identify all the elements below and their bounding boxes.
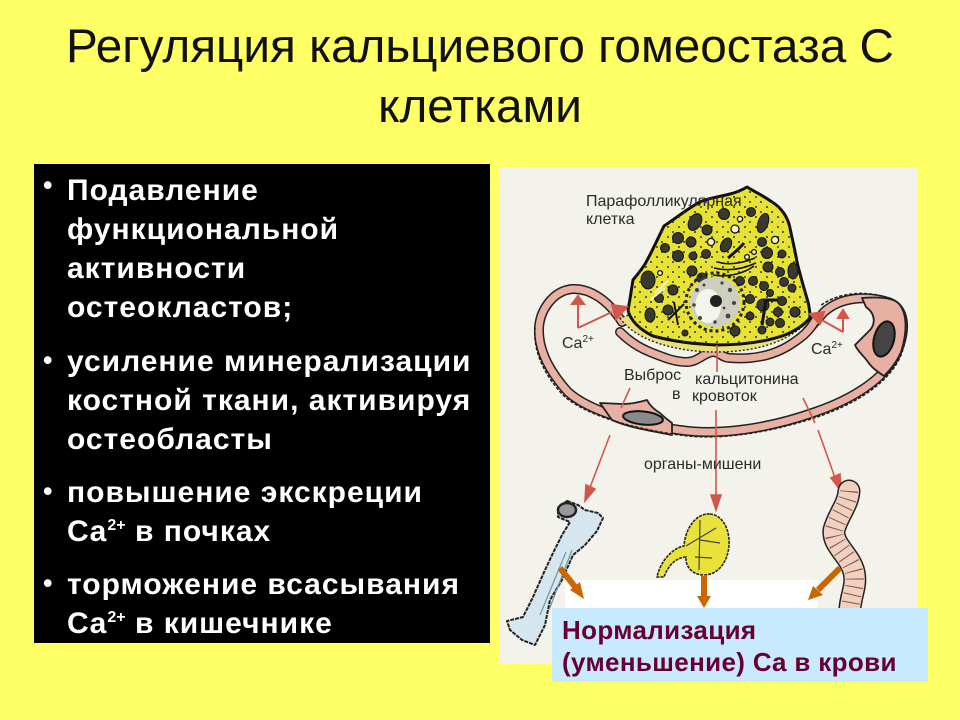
kidney with ureter	[657, 514, 729, 577]
panel: calcitonin effects list: •	[43, 568, 52, 598]
diagram labels: органы-мишени	[644, 456, 761, 473]
white strip behind arrows	[565, 580, 818, 610]
golgi apparatus	[650, 243, 756, 300]
title	[66, 20, 894, 133]
bullet: osteoclast suppression: остеокластов;	[67, 291, 293, 324]
diagram labels: кровоток	[692, 388, 758, 405]
panel: calcitonin effects list: •	[43, 170, 52, 200]
lower left endothelial cell	[600, 400, 672, 435]
bullet: osteoclast suppression: функциональной	[67, 213, 339, 246]
left calcium arrow	[578, 300, 612, 328]
diagram labels: 2+	[582, 334, 594, 345]
bullet: mineralization: остеобласты	[67, 423, 273, 456]
bullet: mineralization: усиление минерализации	[67, 345, 471, 378]
diagram labels: клетка	[586, 211, 635, 228]
diagram labels: 2+	[831, 340, 843, 351]
stipple granules	[628, 187, 810, 345]
capillary vessel	[535, 289, 907, 437]
bullet: osteoclast suppression	[43, 170, 339, 324]
diagram labels: Ca	[562, 335, 582, 352]
diagram labels: в	[672, 386, 680, 403]
vessel segment under the cell	[620, 318, 817, 362]
bullet: calcium absorption: Ca2+ в кишечнике	[67, 607, 333, 640]
bullet: calcium excretion: повышение экскреции	[67, 476, 423, 509]
diagram background	[500, 168, 917, 664]
panel: calcitonin effects list: •	[43, 476, 52, 506]
nucleus	[686, 273, 744, 331]
panel: calcitonin effects list: •	[43, 345, 52, 375]
callout: normalization of blood calcium: (уменьшение) Ca в крови	[562, 647, 897, 677]
callout: normalization of blood calcium	[552, 608, 928, 682]
bullet: calcium absorption	[43, 568, 460, 640]
bone	[507, 501, 603, 645]
bullet: calcium excretion: Ca2+ в почках	[67, 515, 271, 548]
bullet: calcium absorption: торможение всасывания	[67, 568, 460, 601]
vesicles	[658, 216, 779, 275]
bullet: osteoclast suppression: Подавление	[67, 174, 259, 207]
calcium arrows	[572, 296, 848, 332]
title: клетками	[378, 80, 582, 133]
pericapillary dotted line	[535, 293, 907, 437]
intestine	[834, 491, 855, 608]
diagram labels: Ca	[811, 341, 831, 358]
callout: normalization of blood calcium: Нормализация	[562, 615, 756, 645]
orange arrows to result	[560, 568, 840, 608]
right calcium arrow	[820, 314, 843, 332]
bullet: mineralization: костной ткани, активируя	[67, 384, 471, 417]
bullet: calcium excretion	[43, 476, 423, 548]
bullet: osteoclast suppression: активности	[67, 252, 246, 285]
diagram labels: Выброс	[624, 367, 681, 384]
right endothelial nucleus	[870, 319, 898, 359]
hormone release arrows to target organs	[585, 345, 841, 510]
secretory granules	[641, 208, 800, 336]
panel: calcitonin effects list	[34, 164, 490, 643]
diagram labels	[562, 193, 843, 473]
cell body	[628, 187, 810, 345]
basal stippled band	[620, 314, 814, 352]
parafollicular cell	[620, 187, 814, 352]
title: Регуляция кальциевого гомеостаза С	[66, 20, 894, 73]
bullet: mineralization	[43, 345, 471, 456]
diagram labels: кальцитонина	[695, 371, 799, 388]
right endothelial cell	[855, 297, 906, 376]
diagram labels: Парафолликулярная	[586, 193, 742, 210]
lower left endothelial nucleus	[622, 409, 664, 427]
mitochondria	[668, 300, 778, 325]
